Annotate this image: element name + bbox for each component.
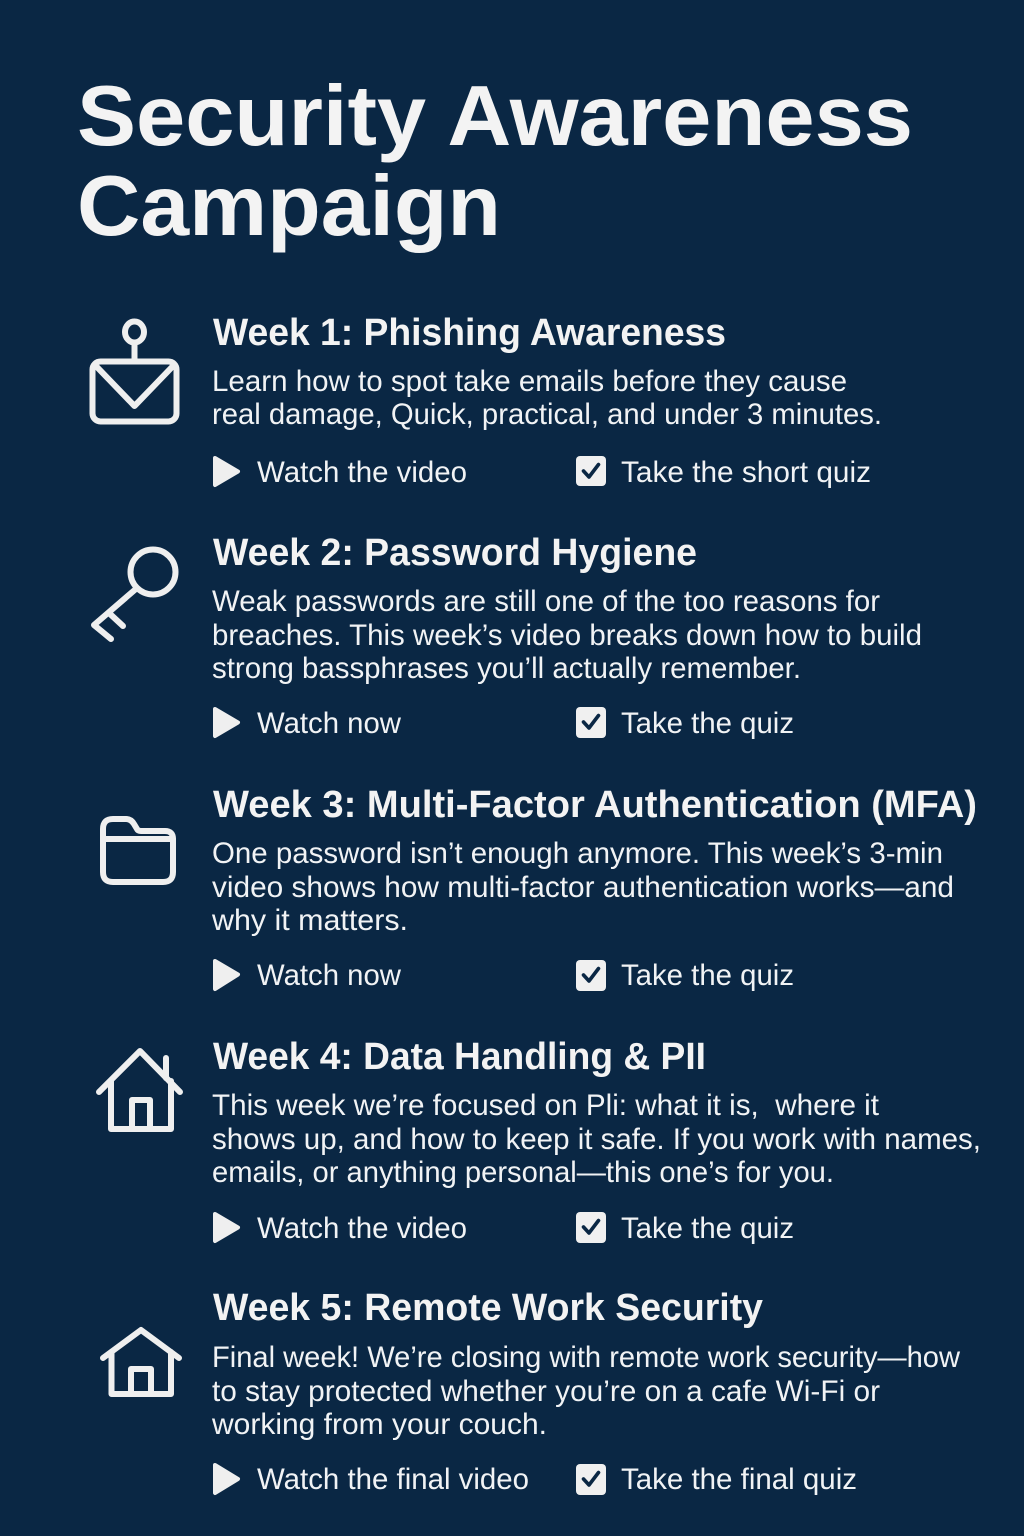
link: take the quiz: Take the quiz [621,959,794,992]
heading: week 1: Week 1: Phishing Awareness [213,312,726,354]
text: week 4 description: shows up, and how to keep it safe. If you work with names, [212,1123,981,1156]
panel: week 1 [92,312,882,489]
heading: week 4: Week 4: Data Handling & PII [213,1036,706,1078]
text: week 3 description: video shows how multi-factor authentication works—and [212,871,954,904]
text: week 1 description [212,365,882,431]
panel: week 4 [99,1036,981,1245]
link: watch the video: Watch the video [257,1212,467,1245]
text: week 1 description: real damage, Quick, practical, and under 3 minutes. [212,398,882,431]
link: take the short quiz: Take the short quiz [621,456,871,489]
title: Campaign [77,159,501,254]
panel: week 3 [103,784,977,992]
title: Security Awareness [77,69,913,164]
panel: week 2 [94,532,922,740]
link: watch the video: Watch the video [257,456,467,489]
heading: week 3: Week 3: Multi-Factor Authentication (MFA) [213,784,977,826]
panel: week 5 [103,1287,960,1496]
icon: folder [103,819,173,882]
link: take the quiz: Take the quiz [621,707,794,740]
icon: key [94,550,176,639]
text: week 1 description: Learn how to spot take emails before they cause [212,365,847,398]
text: week 2 description: strong bassphrases you’ll actually remember. [212,652,801,685]
link: take the quiz: Take the quiz [621,1212,794,1245]
text: week 4 description [212,1089,981,1189]
text: week 5 description: Final week! We’re closing with remote work security—how [212,1341,960,1374]
text: week 5 description [211,1341,960,1441]
link: take the final quiz: Take the final quiz [621,1463,857,1496]
text: week 3 description: One password isn’t enough anymore. This week’s 3-min [212,837,943,870]
icon: house with chimney [99,1051,180,1129]
link: watch the final video: Watch the final video [257,1463,529,1496]
heading: week 2: Week 2: Password Hygiene [213,532,697,574]
text: week 2 description: Weak passwords are still one of the too reasons for [212,585,880,618]
link: watch now: Watch now [257,959,401,992]
text: week 3 description: why it matters. [211,904,408,937]
text: week 4 description: This week we’re focused on Pli: what it is, where it [212,1089,880,1122]
text: week 3 description [211,837,954,937]
title [77,69,913,254]
text: week 2 description: breaches. This week’s video breaks down how to build [212,619,922,652]
text: week 2 description [212,585,922,685]
text: week 5 description: working from your couch. [211,1408,547,1441]
link: watch now: Watch now [257,707,401,740]
text: week 5 description: to stay protected whether you’re on a cafe Wi-Fi or [212,1375,880,1408]
heading: week 5: Week 5: Remote Work Security [213,1287,763,1329]
icon: phishing envelope [92,322,176,422]
text: week 4 description: emails, or anything personal—this one’s for you. [212,1156,834,1189]
icon: house [103,1330,179,1394]
